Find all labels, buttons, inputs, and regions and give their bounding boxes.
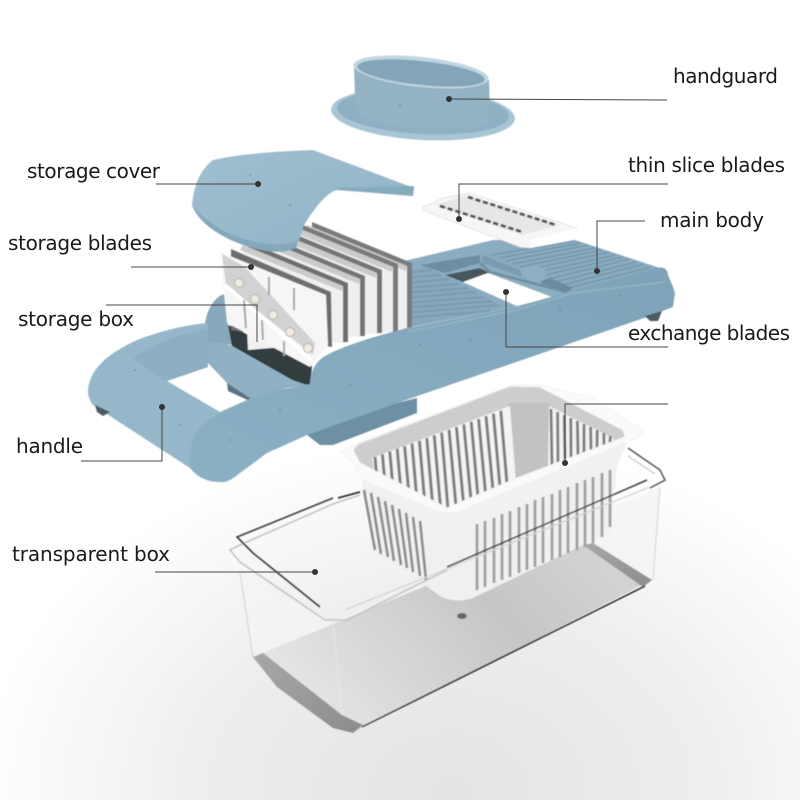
label: thin slice blades: thin slice blades <box>628 153 785 177</box>
dark cavity <box>228 325 312 387</box>
label: transparent box: transparent box <box>12 542 170 566</box>
leader: transparent box <box>155 569 318 575</box>
basket outer slots left <box>364 490 426 580</box>
label: handguard: handguard <box>673 64 778 88</box>
front blade plate <box>220 252 328 367</box>
blade plate 3 <box>265 235 365 338</box>
leader: storage cover <box>156 181 261 187</box>
label: storage cover: storage cover <box>27 159 161 183</box>
ribbed deck right <box>482 239 657 293</box>
blade plate 5 <box>298 223 398 332</box>
leader: exchange blades <box>503 289 668 347</box>
tray underside <box>307 398 417 445</box>
blade plate 4 <box>282 229 382 335</box>
leader: storage blades <box>131 264 254 270</box>
handguard <box>330 50 516 145</box>
leader: thin slice blades <box>456 184 668 222</box>
ribbed deck left <box>402 267 505 328</box>
basket outer shell <box>362 467 617 600</box>
basket rim <box>340 385 644 513</box>
storage blades <box>220 222 412 367</box>
leader: main body <box>594 221 645 274</box>
transparent box rim <box>230 448 665 620</box>
exchange blades opening <box>445 263 567 306</box>
transparent box body <box>240 487 660 733</box>
leader: basket <box>562 404 668 466</box>
label: main body: main body <box>660 208 764 232</box>
leader: handle <box>81 404 165 461</box>
main body rear <box>400 240 660 328</box>
handle <box>88 323 220 468</box>
background floor shade <box>0 400 800 800</box>
blade plate 2 <box>248 242 348 344</box>
storage tray <box>207 342 307 400</box>
label: storage blades: storage blades <box>8 231 152 255</box>
storage cover <box>192 150 414 252</box>
basket back wall slots <box>375 411 507 509</box>
basket interior <box>353 386 625 508</box>
blade plate 6 <box>312 222 412 330</box>
main body front <box>134 104 675 482</box>
thin slice blades <box>423 193 577 248</box>
basket <box>340 385 644 600</box>
label: handle: handle <box>16 434 83 458</box>
basket right wall <box>548 406 616 468</box>
leader: handguard <box>446 96 667 102</box>
basket outer slots front <box>477 470 610 590</box>
label: exchange blades: exchange blades <box>628 321 790 345</box>
basket back wall <box>372 406 516 510</box>
rear rounded housing <box>205 294 247 352</box>
basket collar <box>362 442 627 527</box>
label: storage box: storage box <box>18 307 134 331</box>
leader: storage box <box>106 305 257 342</box>
